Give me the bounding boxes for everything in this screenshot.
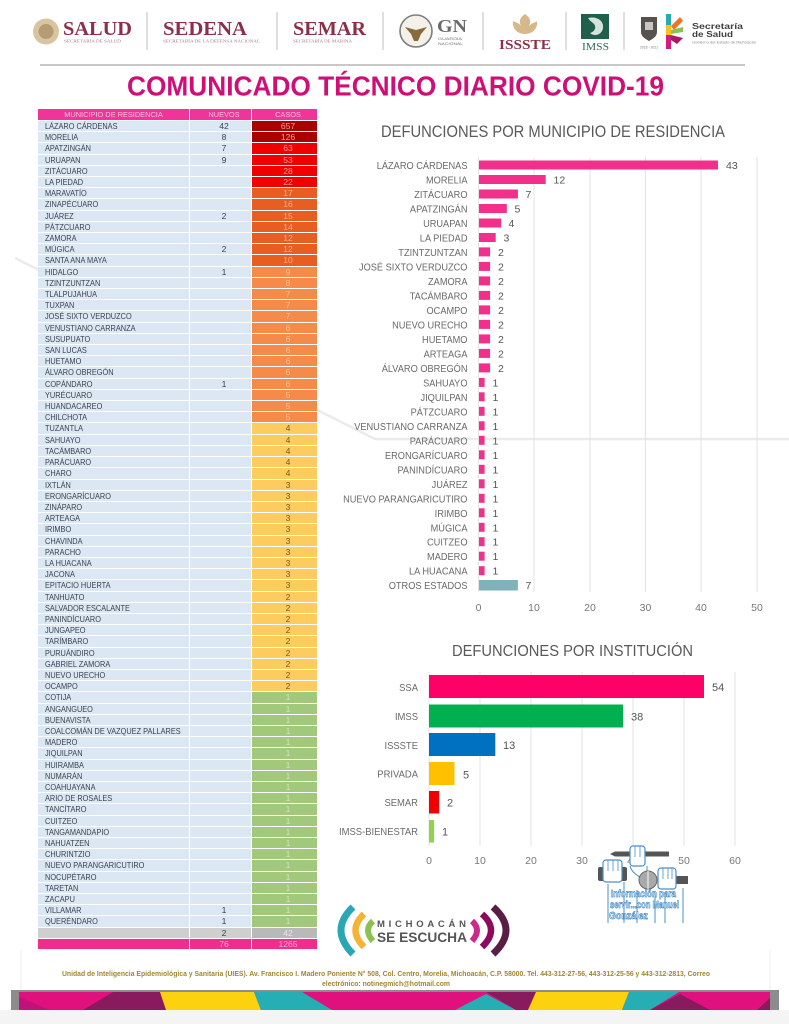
table: cases by municipality: 1 — [222, 905, 226, 915]
table: cases by municipality: 1 — [286, 704, 290, 714]
table: cases by municipality: 2 — [286, 670, 290, 680]
table: cases by municipality: 63 — [283, 143, 293, 153]
table: cases by municipality: 1 — [286, 726, 290, 736]
table: cases by municipality: 1 — [286, 692, 290, 702]
table: cases by municipality: 1 — [222, 379, 226, 389]
municipality labels: IRIMBO — [435, 508, 468, 520]
table: cases by municipality: 5 — [286, 401, 290, 411]
institution labels — [339, 683, 418, 838]
value labels: 1 — [492, 537, 498, 549]
table: cases by municipality: 6 — [286, 367, 290, 377]
chart title: DEFUNCIONES POR MUNICIPIO DE RESIDENCIA — [381, 123, 725, 141]
logo: Información para servir con Manuel González: servir...con Manuel — [610, 899, 679, 911]
table: cases by municipality: 1 — [286, 883, 290, 893]
table: cases by municipality: HUETAMO — [44, 356, 81, 366]
table: cases by municipality: 2 — [286, 592, 290, 602]
municipality labels: OCAMPO — [426, 305, 468, 317]
municipality labels: MORELIA — [426, 175, 468, 187]
logo: Guardia Nacional: GUARDIA — [438, 36, 462, 41]
value labels: 5 — [463, 770, 469, 782]
table: cases by municipality: TARETAN — [44, 883, 78, 893]
table: cases by municipality: YURÉCUARO — [44, 390, 92, 400]
table: cases by municipality: 1 — [286, 782, 290, 792]
table: cases by municipality: 14 — [283, 222, 293, 232]
institution labels: PRIVADA — [377, 769, 418, 781]
value labels: 4 — [508, 218, 514, 230]
table: cases by municipality: JUÁREZ — [44, 211, 73, 221]
value labels: 1 — [492, 377, 498, 389]
table: cases by municipality: 4 — [286, 435, 290, 445]
table: cases by municipality: SANTA ANA MAYA — [44, 255, 106, 265]
table: cases by municipality: 10 — [283, 255, 293, 265]
table: cases by municipality: BUENAVISTA — [44, 715, 90, 725]
logo: Sedena: SECRETARÍA DE LA DEFENSA NACIONAL — [163, 38, 260, 44]
table: cases by municipality: 4 — [286, 468, 290, 478]
logo: Semar: SECRETARÍA DE MARINA — [293, 38, 353, 44]
municipality labels: URUAPAN — [423, 219, 468, 230]
table: cases by municipality: SALVADOR ESCALANTE — [44, 603, 129, 613]
institution labels: IMSS — [395, 712, 418, 723]
table: cases by municipality: 7 — [286, 311, 290, 321]
table: cases by municipality: SAHUAYO — [44, 435, 80, 445]
table: cases by municipality: 1 — [286, 872, 290, 882]
table: cases by municipality: OCAMPO — [44, 681, 77, 691]
value labels: 1 — [492, 450, 498, 462]
value labels: 2 — [498, 261, 504, 273]
logo: Guardia Nacional: GN — [437, 16, 467, 36]
chart: deaths by municipality — [343, 123, 763, 614]
table: cases by municipality: ARTEAGA — [44, 513, 80, 523]
table: cases by municipality: 1 — [286, 816, 290, 826]
table: cases by municipality: 9 — [222, 155, 226, 165]
municipality labels: NUEVO PARANGARICUTIRO — [343, 494, 468, 505]
value labels: 2 — [498, 334, 504, 346]
table: cases by municipality: 1 — [222, 916, 226, 926]
x axis ticks: 0 — [426, 855, 432, 867]
municipality labels: MADERO — [427, 552, 468, 563]
table: cases by municipality: NOCUPÉTARO — [44, 872, 96, 882]
x axis ticks: 60 — [729, 855, 741, 867]
table: cases by municipality: 6 — [286, 334, 290, 344]
value labels: 2 — [498, 290, 504, 302]
x axis ticks: 40 — [627, 855, 639, 867]
row: totals — [38, 939, 317, 949]
value labels: 54 — [712, 682, 724, 694]
table: cases by municipality: TUZANTLA — [44, 423, 83, 433]
table: cases by municipality: ERONGARÍCUARO — [44, 491, 110, 501]
logo: Semar: SEMAR — [293, 18, 367, 40]
table: cases by municipality: 8 — [222, 132, 226, 142]
table: cases by municipality: SUSUPUATO — [44, 334, 90, 344]
municipality labels: JUÁREZ — [432, 479, 468, 491]
institution labels: ISSSTE — [384, 741, 418, 752]
institution labels: SEMAR — [384, 798, 418, 809]
x axis ticks: 50 — [678, 855, 690, 867]
logo: Salud: SECRETARÍA DE SALUD — [64, 38, 122, 44]
chart title: DEFUNCIONES POR INSTITUCIÓN — [452, 641, 693, 660]
x axis ticks: 30 — [640, 602, 651, 614]
table: cases by municipality: 9 — [286, 267, 290, 277]
table: cases by municipality: 7 — [286, 289, 290, 299]
municipality labels: HUETAMO — [422, 334, 468, 346]
table: cases by municipality: VENUSTIANO CARRANZA — [44, 323, 135, 333]
table: cases by municipality: 2 — [222, 244, 226, 254]
table: cases by municipality: CHARO — [44, 468, 71, 478]
logo: Salud: SALUD — [63, 18, 132, 40]
table: cases by municipality: 3 — [286, 524, 290, 534]
table: cases by municipality: 1 — [286, 894, 290, 904]
table: cases by municipality: HUANDACAREO — [44, 401, 102, 411]
table: cases by municipality: COPÁNDARO — [44, 379, 92, 389]
table: cases by municipality: MORELIA — [44, 132, 78, 142]
table: cases by municipality: IRIMBO — [44, 524, 71, 534]
table: cases by municipality: EPITACIO HUERTA — [44, 580, 110, 590]
logo: IMSS — [581, 14, 609, 53]
table: cases by municipality: JOSÉ SIXTO VERDUZCO — [44, 311, 131, 321]
table: cases by municipality: 1 — [286, 860, 290, 870]
table: cases by municipality: 6 — [286, 356, 290, 366]
municipality labels: ÁLVARO OBREGÓN — [382, 363, 468, 375]
municipality labels: ZITÁCUARO — [414, 190, 468, 201]
table: cases by municipality: 2 — [222, 211, 226, 221]
table: cases by municipality: JIQUILPAN — [44, 748, 82, 758]
table: cases by municipality: APATZINGÁN — [44, 143, 91, 153]
table: cases by municipality: 1 — [286, 905, 290, 915]
value labels: 2 — [498, 363, 504, 375]
table: cases by municipality: CHAVINDA — [44, 536, 82, 546]
table: cases by municipality: GABRIEL ZAMORA — [44, 659, 110, 669]
table: cases by municipality: PANINDÍCUARO — [44, 614, 100, 624]
logo: Sedena: SEDENA — [163, 18, 248, 40]
table: cases by municipality: HUIRAMBA — [44, 760, 83, 770]
municipality labels: TACÁMBARO — [410, 291, 468, 303]
bars — [479, 160, 718, 590]
value labels: 5 — [514, 204, 520, 216]
municipality labels: OTROS ESTADOS — [389, 581, 468, 592]
table: cases by municipality: 4 — [286, 446, 290, 456]
value labels — [442, 682, 724, 838]
logo: Secretaría de Salud Michoacán: Secretaría — [692, 21, 743, 31]
logo: Michoacán shield: 2018 - 2021 — [640, 46, 658, 50]
header logos strip — [33, 12, 756, 66]
table: cases by municipality: 3 — [286, 480, 290, 490]
table: cases by municipality: NUMARÁN — [44, 771, 82, 781]
table: cases by municipality: PARÁCUARO — [44, 457, 91, 467]
municipality labels: TZINTZUNTZAN — [398, 247, 468, 259]
table: cases by municipality: CUITZEO — [44, 816, 77, 826]
value labels: 1 — [492, 479, 498, 491]
table: cases by municipality: 5 — [286, 412, 290, 422]
table: cases by municipality: 12 — [283, 244, 293, 254]
table: cases by municipality: 42 — [219, 121, 229, 131]
logo: Información para servir con Manuel González: González — [609, 910, 648, 922]
municipality labels: ZAMORA — [428, 276, 468, 288]
value labels: 7 — [526, 189, 532, 201]
value labels: 38 — [631, 712, 643, 724]
table: cases by municipality: 6 — [286, 345, 290, 355]
institution labels: SSA — [399, 683, 418, 694]
table: cases by municipality: 1 — [286, 760, 290, 770]
value labels: 1 — [492, 421, 498, 433]
value labels: 1 — [492, 508, 498, 520]
table: cases by municipality: 3 — [286, 569, 290, 579]
value labels: 3 — [504, 232, 510, 244]
table: cases by municipality: ANGANGUEO — [44, 704, 92, 714]
table: cases by municipality: ZITÁCUARO — [44, 166, 87, 176]
table: cases by municipality: 7 — [222, 143, 226, 153]
table: cases by municipality: 3 — [286, 502, 290, 512]
table: cases by municipality: 3 — [286, 513, 290, 523]
logo: ISSSTE: ISSSTE — [499, 38, 551, 53]
table: cases by municipality: 2 — [286, 636, 290, 646]
x axis ticks: 50 — [751, 602, 763, 614]
table: cases by municipality: 22 — [283, 177, 293, 187]
logo: Información para servir con Manuel González: Información para — [611, 888, 676, 900]
logo: Secretaría de Salud Michoacán: Gobierno del Estado de Michoacán — [692, 40, 756, 44]
table: cases by municipality: ZINAPÉCUARO — [44, 199, 98, 209]
logo: Salud — [33, 18, 132, 44]
municipality labels: MÚGICA — [431, 523, 468, 534]
table: cases by municipality: LA PIEDAD — [44, 177, 83, 187]
table: cases by municipality: 6 — [286, 323, 290, 333]
municipality labels — [343, 161, 468, 592]
municipality labels: NUEVO URECHO — [392, 320, 468, 332]
x axis ticks: 10 — [474, 855, 486, 867]
table: cases by municipality: JACONA — [44, 569, 74, 579]
value labels: 43 — [726, 160, 738, 172]
table: cases by municipality: 1 — [286, 748, 290, 758]
municipality labels: PÁTZCUARO — [411, 407, 468, 418]
table: cases by municipality: ZINÁPARO — [44, 502, 82, 512]
table: cases by municipality: 2 — [286, 681, 290, 691]
value labels: 1 — [442, 826, 448, 838]
municipality labels: JOSÉ SIXTO VERDUZCO — [359, 262, 468, 274]
value labels: 1 — [492, 392, 498, 404]
value labels: 7 — [526, 580, 532, 592]
table: cases by municipality: NUEVO PARANGARICUTIRO — [44, 860, 144, 870]
logo: IMSS: IMSS — [582, 42, 609, 53]
municipality labels: PANINDÍCUARO — [397, 465, 468, 476]
table: cases by municipality: TANCÍTARO — [44, 804, 86, 814]
table: cases by municipality: 2 — [286, 648, 290, 658]
table: cases by municipality: QUERÉNDARO — [44, 916, 97, 926]
table: cases by municipality: MÚGICA — [44, 244, 74, 254]
table: cases by municipality: 4 — [286, 457, 290, 467]
table: cases by municipality: SAN LUCAS — [44, 345, 86, 355]
municipality labels: SAHUAYO — [423, 378, 468, 390]
table: cases by municipality: NUEVO URECHO — [44, 670, 105, 680]
table: cases by municipality: 1 — [222, 267, 226, 277]
value labels: 12 — [554, 174, 565, 186]
municipality labels: ARTEAGA — [424, 349, 468, 361]
table: cases by municipality: NAHUATZEN — [44, 838, 89, 848]
municipality labels: VENUSTIANO CARRANZA — [354, 421, 468, 433]
table: cases by municipality: 4 — [286, 423, 290, 433]
table: cases by municipality: 1 — [286, 804, 290, 814]
table: cases by municipality: 1 — [286, 849, 290, 859]
institution labels: IMSS-BIENESTAR — [339, 827, 418, 838]
value labels — [492, 160, 738, 592]
table: cases by municipality: VILLAMAR — [44, 905, 81, 915]
table header — [38, 109, 317, 120]
table: cases by municipality: 1 — [286, 827, 290, 837]
table: cases by municipality: 1 — [286, 916, 290, 926]
municipality labels: ERONGARÍCUARO — [385, 450, 468, 462]
value labels: 2 — [498, 319, 504, 331]
table: cases by municipality: 2 — [286, 659, 290, 669]
table: cases by municipality: COALCOMÁN DE VAZQUEZ PALLARES — [44, 726, 180, 736]
municipality labels: JIQUILPAN — [420, 392, 468, 404]
logo: ISSSTE — [499, 14, 551, 53]
table: cases by municipality: 6 — [286, 379, 290, 389]
logo: Michoacán shield — [640, 17, 658, 50]
table: cases by municipality: ZACAPU — [44, 894, 74, 904]
municipality labels: LÁZARO CÁRDENAS — [377, 161, 468, 172]
row: other states subtotal: 2 — [222, 928, 226, 938]
x axis ticks: 20 — [584, 602, 596, 614]
main title: COMUNICADO TÉCNICO DIARIO COVID-19 — [127, 70, 664, 102]
municipality labels: LA PIEDAD — [420, 233, 468, 245]
value labels: 2 — [498, 348, 504, 360]
table: cases by municipality: PURUÁNDIRO — [44, 648, 94, 658]
row: totals: 1265 — [278, 939, 298, 949]
value labels: 1 — [492, 435, 498, 447]
table: cases by municipality: MADERO — [44, 737, 77, 747]
table: cases by municipality: 15 — [283, 211, 293, 221]
x axis ticks — [476, 602, 763, 614]
table: cases by municipality: 1 — [286, 771, 290, 781]
table: cases by municipality: 2 — [286, 603, 290, 613]
table: cases by municipality: 657 — [281, 121, 295, 131]
table: cases by municipality: PÁTZCUARO — [44, 222, 90, 232]
table: cases by municipality: 7 — [286, 300, 290, 310]
value labels: 1 — [492, 551, 498, 563]
logo: Guardia Nacional: NACIONAL — [438, 41, 464, 46]
table: cases by municipality: 1 — [286, 737, 290, 747]
x axis ticks: 10 — [528, 602, 540, 614]
table: cases by municipality: TZINTZUNTZAN — [44, 278, 100, 288]
table: cases by municipality: 3 — [286, 536, 290, 546]
table: cases by municipality: 3 — [286, 491, 290, 501]
table: cases by municipality: LA HUACANA — [44, 558, 91, 568]
table: cases by municipality: 3 — [286, 558, 290, 568]
table: cases by municipality: 3 — [286, 580, 290, 590]
table: cases by municipality: ARIO DE ROSALES — [44, 793, 112, 803]
logo: Secretaría de Salud Michoacán — [666, 14, 756, 49]
table: cases by municipality: 3 — [286, 547, 290, 557]
table: cases by municipality: CHILCHOTA — [44, 412, 87, 422]
table: cases by municipality: TLALPUJAHUA — [44, 289, 97, 299]
municipality labels: PARÁCUARO — [410, 436, 468, 447]
x axis ticks: 20 — [525, 855, 537, 867]
table: cases by municipality: 5 — [286, 390, 290, 400]
row: other states subtotal — [38, 928, 317, 938]
table: cases by municipality: LÁZARO CÁRDENAS — [44, 121, 117, 131]
bars — [429, 675, 704, 842]
row: other states subtotal: 42 — [283, 928, 293, 938]
value labels: 1 — [492, 493, 498, 505]
logo: Michoacán se escucha: SE ESCUCHA — [377, 929, 467, 945]
table: cases by municipality: 1 — [286, 715, 290, 725]
table: cases by municipality: PARACHO — [44, 547, 80, 557]
table: cases by municipality: 126 — [281, 132, 295, 142]
x axis ticks — [426, 855, 741, 867]
table: cases by municipality: ÁLVARO OBREGÓN — [44, 367, 113, 377]
table: cases by municipality: TUXPAN — [44, 300, 74, 310]
table: cases by municipality: 16 — [283, 199, 293, 209]
logo: Secretaría de Salud Michoacán: de Salud — [692, 29, 733, 39]
table: cases by municipality: 1 — [286, 838, 290, 848]
logo: Michoacán se escucha: MICHOACÁN — [377, 919, 466, 930]
table: cases by municipality: 1 — [286, 793, 290, 803]
municipality labels: CUITZEO — [427, 537, 468, 549]
x axis ticks: 0 — [476, 602, 482, 614]
table: cases by municipality: TANGAMANDAPIO — [44, 827, 109, 837]
table: cases by municipality: 2 — [286, 625, 290, 635]
table: cases by municipality: HIDALGO — [44, 267, 78, 277]
value labels: 2 — [498, 305, 504, 317]
value labels: 1 — [492, 464, 498, 476]
table: cases by municipality: COTIJA — [44, 692, 71, 702]
table header: NUEVOS — [208, 110, 240, 119]
table header: CASOS — [275, 110, 301, 119]
value labels: 2 — [498, 276, 504, 288]
municipality labels: LA HUACANA — [409, 566, 468, 578]
table: cases by municipality: JUNGAPEO — [44, 625, 85, 635]
table: cases by municipality: MARAVATÍO — [44, 188, 86, 198]
footer contact text: electrónico: notinegmich@hotmail.com — [322, 979, 450, 988]
value labels: 1 — [492, 566, 498, 578]
row: totals: 76 — [219, 939, 229, 949]
value labels: 2 — [498, 247, 504, 259]
municipality labels: APATZINGÁN — [410, 204, 468, 216]
table: cases by municipality: URUAPAN — [44, 155, 80, 165]
table: cases by municipality: 8 — [286, 278, 290, 288]
table: cases by municipality: 28 — [283, 166, 293, 176]
table: cases by municipality: TARÍMBARO — [44, 636, 88, 646]
x axis ticks: 30 — [576, 855, 588, 867]
table: cases by municipality: 53 — [283, 155, 293, 165]
table: cases by municipality: CHURINTZIO — [44, 849, 90, 859]
table: cases by municipality: 12 — [283, 233, 293, 243]
footer contact text: Unidad de Inteligencia Epidemiológica y Sanitaria (UIES). Av. Francisco I. Madero Poniente N° 508, Col. Centro, Morelia, Michoacán, C.P. 58000. Tel. 443-312-27-56, 443-312-25-56 y 443-312-2813, Correo — [62, 969, 710, 978]
value labels: 13 — [503, 740, 515, 752]
x axis ticks: 40 — [695, 602, 707, 614]
logo: Guardia Nacional — [400, 15, 467, 47]
table: cases by municipality: COAHUAYANA — [44, 782, 95, 792]
table: cases by municipality: ZAMORA — [44, 233, 76, 243]
value labels: 1 — [492, 522, 498, 534]
table: cases by municipality: 2 — [286, 614, 290, 624]
table: cases by municipality — [38, 109, 317, 952]
table: cases by municipality: TACÁMBARO — [44, 446, 91, 456]
table: cases by municipality: TANHUATO — [44, 592, 84, 602]
table: cases by municipality: IXTLÁN — [44, 480, 70, 490]
value labels: 2 — [447, 798, 453, 810]
value labels: 1 — [492, 406, 498, 418]
table header: MUNICIPIO DE RESIDENCIA — [64, 110, 163, 119]
table: cases by municipality: 17 — [283, 188, 293, 198]
